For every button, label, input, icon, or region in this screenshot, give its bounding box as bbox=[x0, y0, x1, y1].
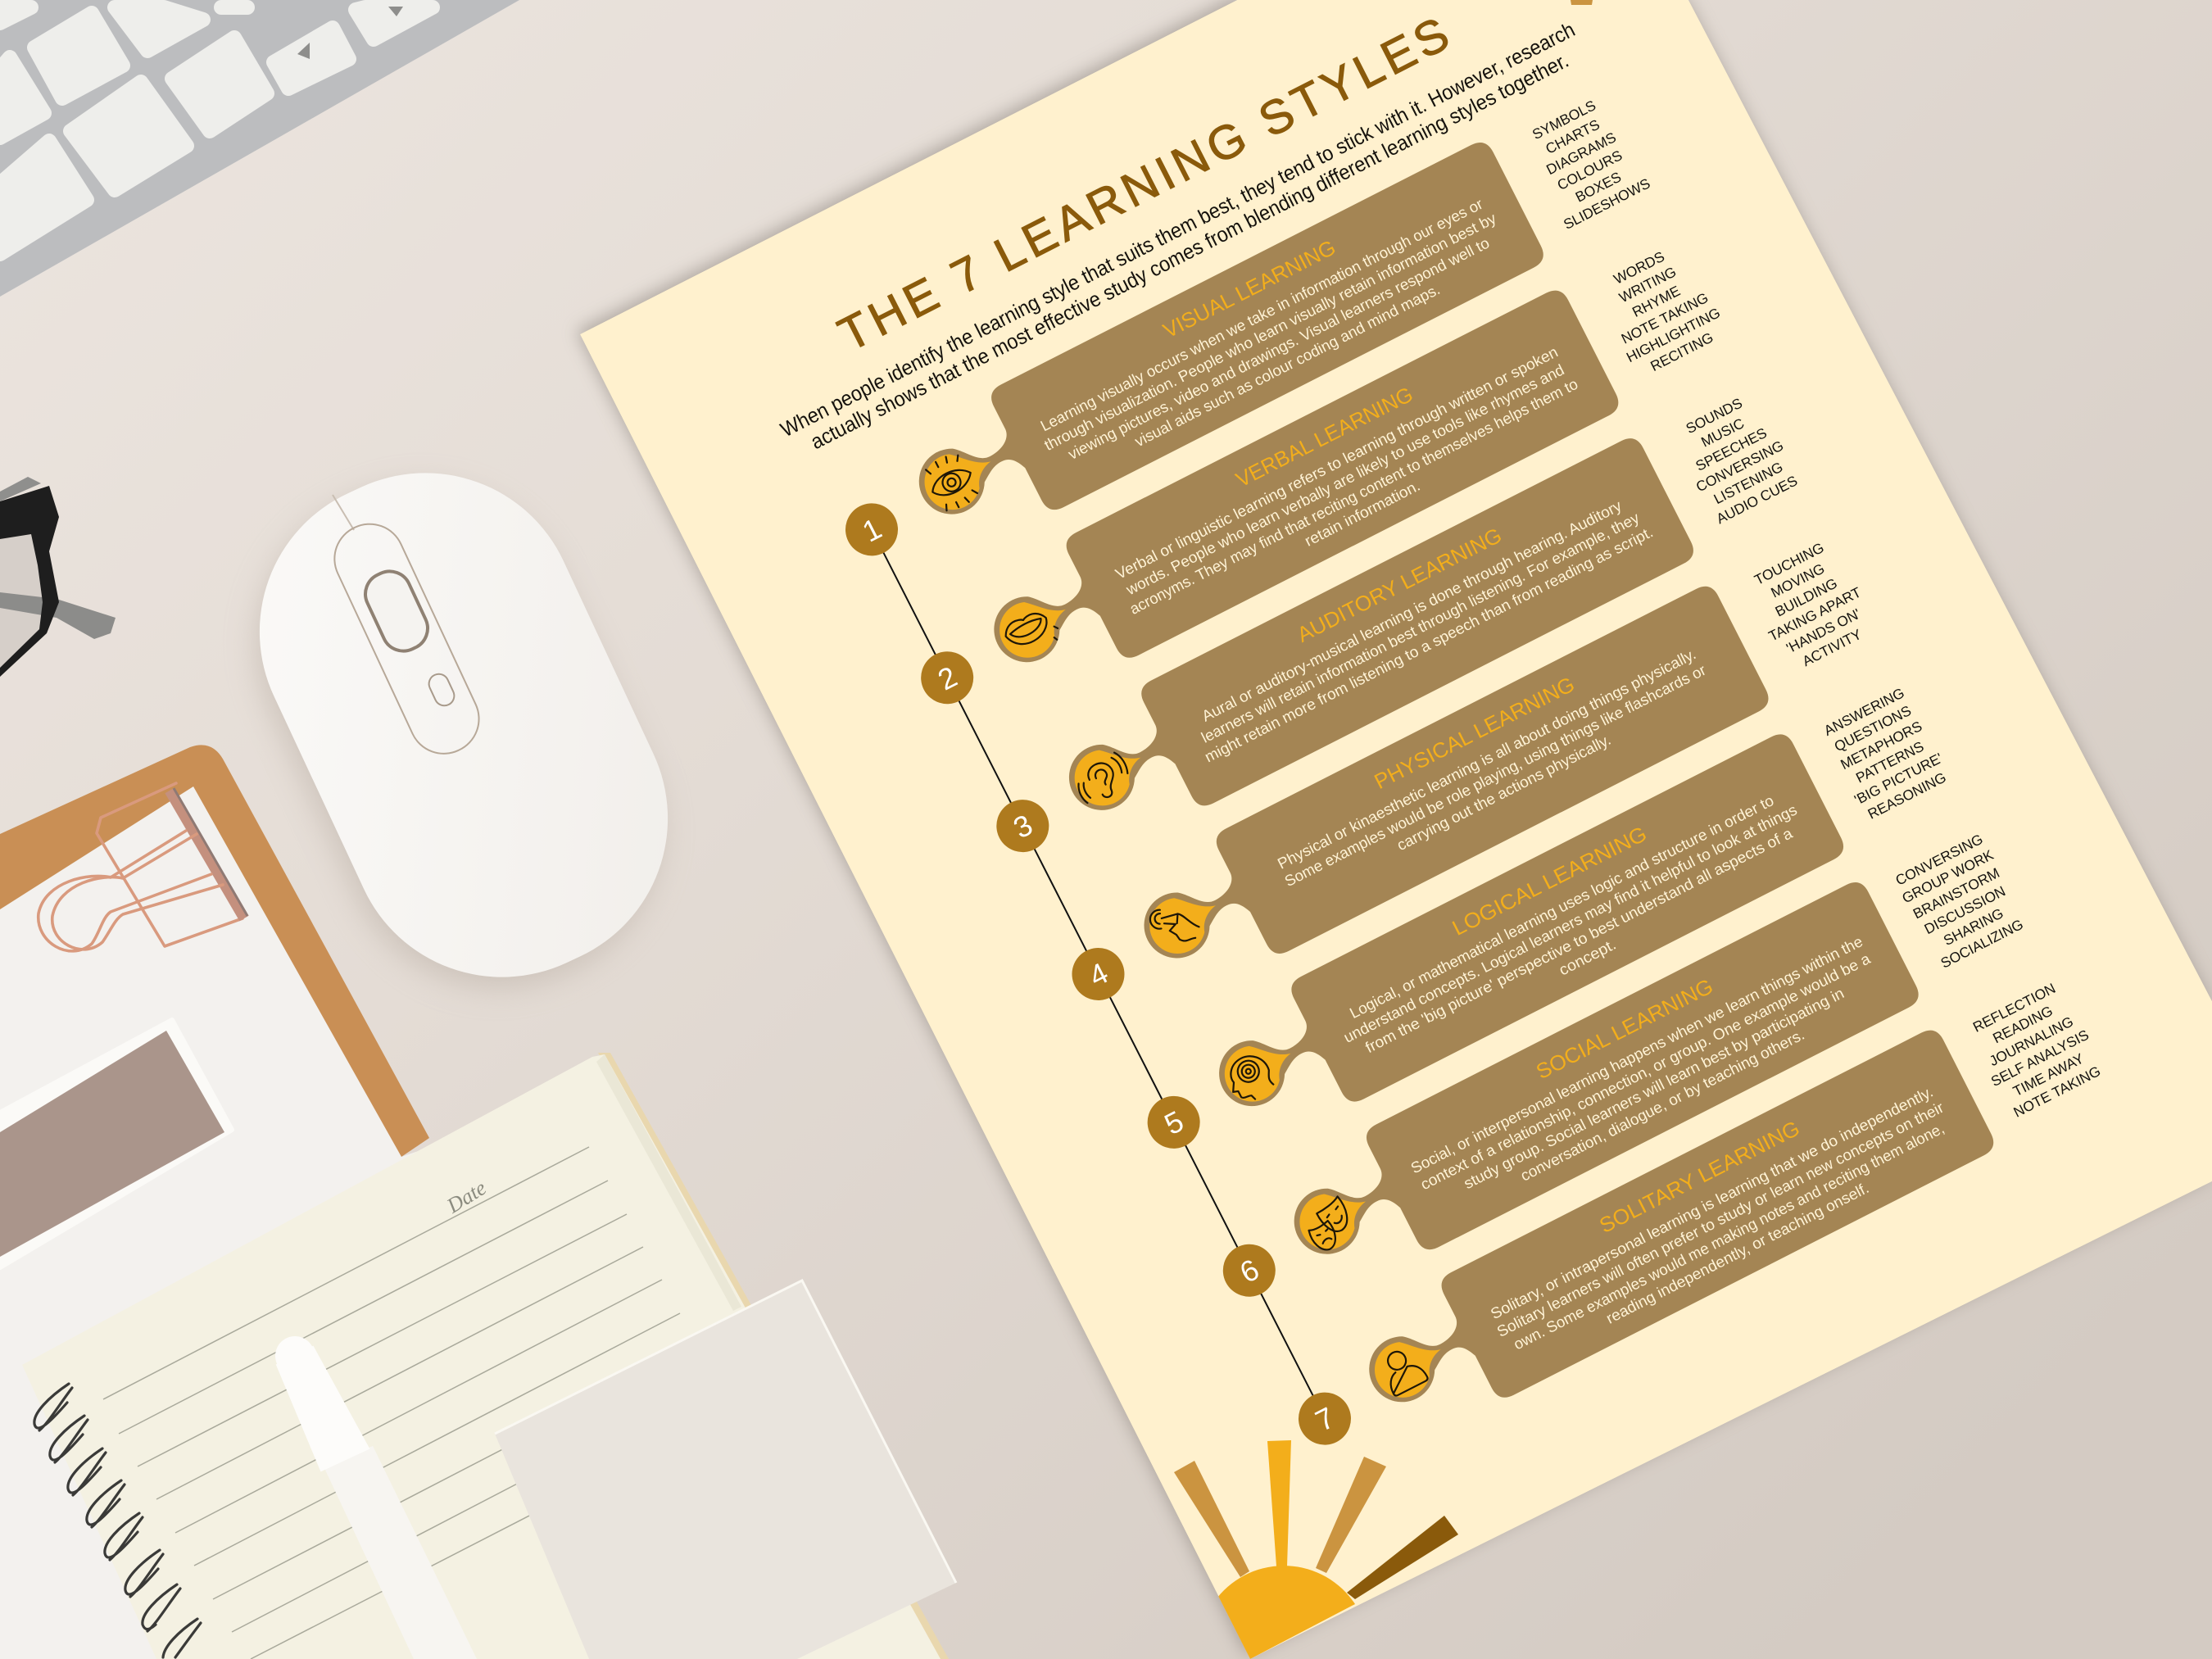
white pen bbox=[275, 1336, 477, 1659]
spiral binding rings bbox=[34, 1384, 201, 1657]
keyword list: SPEECHES bbox=[1693, 424, 1770, 474]
sun decoration bbox=[1174, 1440, 1458, 1659]
number badge 1: 1 bbox=[857, 511, 886, 549]
heading: SOCIAL LEARNING bbox=[1532, 973, 1717, 1084]
step 2: verbal learning bbox=[891, 227, 1738, 749]
keyword list bbox=[1740, 533, 1881, 678]
body text: Learning visually occurs when we take in information through our eyes or bbox=[1037, 195, 1485, 434]
icon: touching hand bbox=[1140, 882, 1229, 963]
number badge 3 bbox=[987, 791, 1058, 861]
keyword list: CHARTS bbox=[1543, 116, 1602, 157]
step 7: solitary learning bbox=[1268, 966, 2115, 1489]
sticky note pad bbox=[495, 1281, 956, 1659]
keyword list: CONVERSING bbox=[1892, 831, 1986, 889]
keyword list: ANSWERING bbox=[1821, 684, 1907, 739]
heading: PHYSICAL LEARNING bbox=[1371, 672, 1579, 794]
number badge 2: 2 bbox=[932, 660, 963, 696]
body text: words. People who learn verbally are likely to use tools like rhymes and bbox=[1122, 360, 1567, 599]
body text: study group. Social learners will learn best by participating in bbox=[1461, 984, 1847, 1192]
card shape with teardrop bbox=[1118, 582, 1774, 1006]
keyword list bbox=[1668, 387, 1803, 528]
icon: mouth bbox=[990, 586, 1079, 668]
card shape with teardrop bbox=[968, 286, 1623, 710]
keyword list: READING bbox=[1990, 1002, 2056, 1046]
white paper on clipboard bbox=[0, 786, 623, 1659]
body text: Physical or kinaesthetic learning is all about doing things physically. bbox=[1275, 645, 1698, 873]
wooden clipboard bbox=[0, 745, 429, 1229]
icon: ear bbox=[1065, 733, 1154, 815]
body text: Solitary learners will often prefer to study or learn new concepts on their bbox=[1494, 1099, 1947, 1340]
keyword list: DIAGRAMS bbox=[1543, 129, 1619, 178]
body text: visual aids such as colour coding and mind maps. bbox=[1132, 280, 1443, 450]
keyword list: TIME AWAY bbox=[2010, 1049, 2087, 1099]
keyword list bbox=[1589, 237, 1731, 383]
body text: Social, or interpersonal learning happens when we learn things within the bbox=[1408, 932, 1865, 1176]
keyword list: CONVERSING bbox=[1693, 437, 1786, 495]
page shadow bbox=[577, 0, 2209, 1656]
keyword list: JOURNALING bbox=[1987, 1013, 2076, 1069]
rotated page content bbox=[745, 0, 2115, 1493]
rose gold binder clip bbox=[39, 783, 247, 951]
number badge 6: 6 bbox=[1235, 1252, 1264, 1290]
keyboard bbox=[0, 0, 519, 297]
heading: AUDITORY LEARNING bbox=[1293, 523, 1506, 647]
number badge 3: 3 bbox=[1008, 808, 1038, 845]
keyword list: RECITING bbox=[1648, 329, 1716, 374]
icon: theatre masks bbox=[1290, 1177, 1379, 1259]
body text: retain information. bbox=[1302, 477, 1423, 550]
keyword list: RHYME bbox=[1630, 283, 1683, 320]
heading: SOLITARY LEARNING bbox=[1595, 1116, 1803, 1238]
keyword list bbox=[1817, 682, 1954, 825]
number badge 2 bbox=[912, 642, 982, 713]
body text: context of a relationship, connection, or group. One example would be a bbox=[1417, 950, 1874, 1193]
keyword list: SELF ANALYSIS bbox=[1988, 1027, 2092, 1090]
body text: Solitary, or intrapersonal learning is learning that we do independently. bbox=[1488, 1083, 1936, 1322]
number badge 7 bbox=[1290, 1384, 1360, 1454]
card shape with teardrop bbox=[919, 143, 1543, 514]
keyword list: MUSIC bbox=[1698, 415, 1747, 451]
brown block bbox=[0, 1020, 232, 1267]
body text: reading independently, or teaching onself. bbox=[1603, 1179, 1871, 1327]
step 1: visual learning bbox=[845, 101, 1650, 555]
infographic page bbox=[580, 0, 2212, 1659]
title: THE 7 LEARNING STYLES bbox=[830, 7, 1457, 362]
body text: might retain more from listening to a speech than from reading as script. bbox=[1202, 523, 1656, 765]
card shape with teardrop bbox=[1194, 729, 1848, 1154]
keyword list: NOTE TAKING bbox=[1619, 289, 1711, 347]
eyeglasses bbox=[0, 477, 116, 677]
keyword list: DISCUSSION bbox=[1922, 882, 2008, 937]
body text: Logical, or mathematical learning uses logic and structure in order to bbox=[1347, 791, 1776, 1022]
keyword list: NOTE TAKING bbox=[2010, 1063, 2103, 1121]
keyword list: LISTENING bbox=[1711, 459, 1785, 507]
keyword list: METAPHORS bbox=[1838, 718, 1924, 773]
number badge 5: 5 bbox=[1159, 1104, 1189, 1141]
keyword list: BUILDING bbox=[1773, 574, 1840, 620]
icon: person bbox=[1365, 1326, 1453, 1407]
keyword list bbox=[1533, 101, 1650, 229]
body text: from the 'big picture' perspective to best understand all aspects of a bbox=[1362, 824, 1796, 1056]
number badge 4: 4 bbox=[1083, 956, 1113, 993]
keyword list: REFLECTION bbox=[1970, 980, 2058, 1036]
keyword list: TAKING APART bbox=[1766, 583, 1864, 645]
heading: LOGICAL LEARNING bbox=[1448, 821, 1651, 941]
keyword list: ACTIVITY bbox=[1800, 626, 1865, 669]
body text: concept. bbox=[1556, 936, 1619, 979]
icon: head with target bbox=[1215, 1029, 1303, 1111]
keyword list: COLOURS bbox=[1555, 147, 1625, 193]
keyword list: AUDIO CUES bbox=[1714, 472, 1800, 527]
body text: through visualization. People who learn visually retain information best by bbox=[1041, 209, 1499, 454]
body text: carrying out the actions physically. bbox=[1394, 731, 1613, 854]
keyword list: MOVING bbox=[1768, 560, 1827, 601]
body text: viewing pictures, video and drawings. Visual learners respond well to bbox=[1065, 234, 1492, 463]
keyword list: 'BIG PICTURE' bbox=[1852, 750, 1945, 808]
number badge 1 bbox=[845, 503, 898, 555]
number badge 5 bbox=[1139, 1087, 1209, 1158]
keyword list: BOXES bbox=[1573, 169, 1624, 206]
number badge 4 bbox=[1063, 939, 1134, 1009]
body text: conversation, dialogue, or by teaching others. bbox=[1517, 1026, 1807, 1185]
keyword list: SYMBOLS bbox=[1530, 97, 1598, 143]
card shape with teardrop bbox=[1044, 433, 1698, 858]
keyword list: SOUNDS bbox=[1684, 395, 1745, 437]
card shape with teardrop bbox=[1344, 1026, 1998, 1450]
keyword list: SLIDESHOWS bbox=[1561, 175, 1652, 233]
keyword list: REASONING bbox=[1865, 769, 1949, 823]
body text: acronyms. They may find that reciting content to themselves helps them to bbox=[1126, 375, 1580, 618]
keyword list: 'HANDS ON' bbox=[1784, 605, 1863, 656]
body text: Verbal or linguistic learning refers to learning through written or spoken bbox=[1113, 343, 1561, 582]
notebook bbox=[22, 1053, 949, 1659]
computer mouse bbox=[205, 423, 718, 1039]
keyword list: PATTERNS bbox=[1853, 738, 1926, 786]
card shape with teardrop bbox=[1269, 877, 1924, 1302]
step 3: auditory learning bbox=[967, 376, 1811, 897]
body text: understand concepts. Logical learners may find it helpful to look at things bbox=[1341, 801, 1800, 1046]
step 4: physical learning bbox=[1042, 523, 1888, 1045]
keyword list: BRAINSTORM bbox=[1911, 864, 2002, 922]
keyword list: WORDS bbox=[1611, 248, 1667, 288]
step 6: social learning bbox=[1193, 819, 2037, 1340]
timeline line bbox=[872, 529, 1325, 1419]
body text: learners will retain information best through listening. For example, they bbox=[1199, 509, 1643, 746]
body text: Some examples would be role playing, using things like flashcards or bbox=[1282, 661, 1709, 890]
heading: VISUAL LEARNING bbox=[1159, 235, 1339, 343]
number badge 7: 7 bbox=[1310, 1400, 1339, 1438]
body text: Aural or auditory-musical learning is done through hearing. Auditory bbox=[1199, 496, 1625, 725]
keyword list bbox=[1891, 829, 2031, 973]
keyword list: TOUCHING bbox=[1752, 539, 1827, 588]
keyword list bbox=[1963, 976, 2109, 1123]
intro text: actually shows that the most effective study comes from blending different learning styles together. bbox=[807, 49, 1572, 454]
keyword list: GROUP WORK bbox=[1899, 846, 1997, 906]
keyword list: HIGHLIGHTING bbox=[1624, 304, 1723, 365]
keyword list: QUESTIONS bbox=[1832, 702, 1914, 755]
heading: VERBAL LEARNING bbox=[1232, 382, 1416, 492]
icon: eye bbox=[924, 454, 990, 511]
keyword list: SOCIALIZING bbox=[1938, 916, 2026, 972]
handwritten date label: Date bbox=[442, 1176, 491, 1218]
top corner ray fragment bbox=[1571, 0, 1593, 5]
number badge 6 bbox=[1214, 1235, 1285, 1306]
keyword list: WRITING bbox=[1616, 263, 1679, 306]
keyword list: SHARING bbox=[1941, 904, 2006, 949]
body text: own. Some examples would me making notes and reciting them alone, bbox=[1511, 1119, 1947, 1353]
step 5: logical learning bbox=[1117, 673, 1960, 1193]
